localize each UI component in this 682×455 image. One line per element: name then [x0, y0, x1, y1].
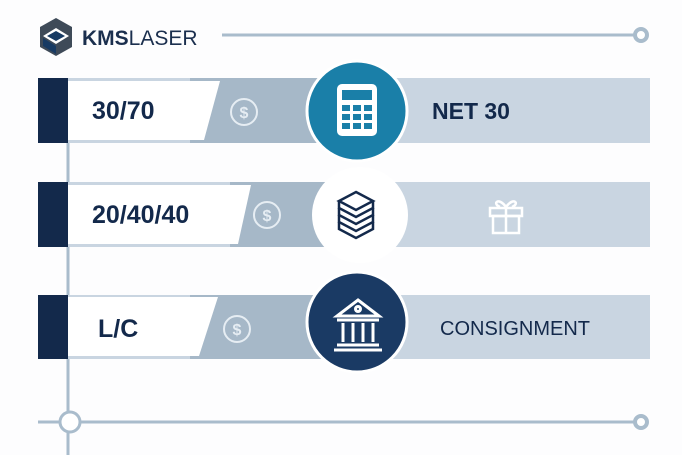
row 3: L/C: L/C	[98, 315, 138, 343]
row 1: 30/70: 30/70	[92, 97, 155, 125]
row 3: L/C	[38, 272, 650, 372]
row 2: 20/40/40: $	[263, 208, 272, 225]
row 1: 30/70: $	[240, 105, 249, 122]
row 3: L/C: CONSIGNMENT	[440, 318, 590, 340]
row 2: 20/40/40	[38, 167, 650, 263]
logo: KMSLASER	[82, 27, 198, 50]
row 1: 30/70: NET 30	[432, 98, 510, 124]
row 3: L/C: $	[233, 322, 242, 339]
logo	[40, 18, 198, 56]
row 2: 20/40/40: 20/40/40	[92, 201, 189, 229]
row 1: 30/70	[38, 61, 650, 161]
